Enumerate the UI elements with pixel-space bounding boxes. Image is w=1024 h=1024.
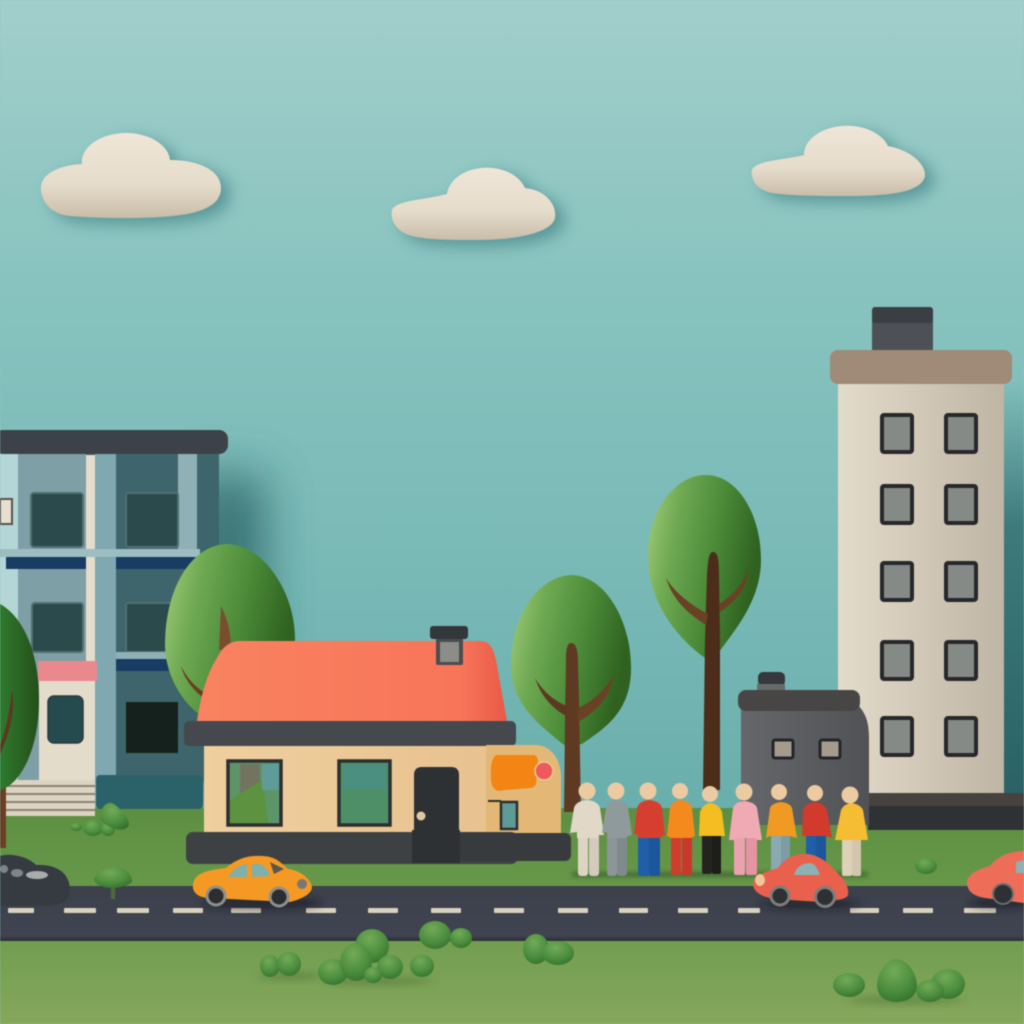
small sign on left: [0, 499, 12, 524]
foundation: [186, 832, 518, 864]
person: orange shirt red trousers: [667, 783, 695, 875]
windows: [31, 493, 178, 652]
house: [184, 626, 571, 864]
person: orange shirt grey trousers: [766, 784, 797, 871]
red car right: [967, 851, 1024, 908]
person: yellow shirt black trousers: [699, 786, 725, 874]
tall tower building: [830, 307, 1024, 830]
cloud left: [41, 133, 230, 224]
person: red shirt blue trousers: [634, 782, 665, 876]
entrance door: [39, 680, 95, 780]
center tree: [511, 575, 631, 812]
people group: [570, 782, 868, 877]
house windows: [228, 761, 281, 825]
shrub near steps: [70, 803, 129, 836]
road: [0, 886, 1024, 941]
person: cream: [570, 782, 604, 876]
small tree on road edge: [94, 867, 132, 899]
tree behind house: [165, 544, 295, 722]
shrub small right of people: [915, 858, 937, 874]
foreground bushes center: [419, 921, 574, 965]
red car center: [753, 854, 860, 909]
road dashes: [8, 908, 996, 913]
person: grey: [602, 782, 632, 876]
tower windows: [882, 415, 976, 755]
boulder left: [0, 855, 70, 906]
right wall dark strip: [1004, 380, 1024, 800]
cloud middle: [392, 168, 564, 246]
ground: grass: [0, 808, 1024, 1024]
soft shadow on the sky wall: [190, 475, 265, 795]
roof slab: [0, 430, 228, 454]
cloud right: [752, 126, 934, 202]
tall tree: [648, 475, 761, 790]
side annex: [486, 745, 561, 838]
door: [414, 767, 459, 862]
cream pillar: [86, 455, 95, 665]
foreground bushes center left: [258, 929, 434, 985]
teal planter: [96, 775, 203, 809]
tower base: [866, 793, 1024, 807]
orange car: [193, 856, 322, 909]
house roof: [197, 641, 507, 721]
steps: [3, 780, 95, 816]
grey small building: [738, 672, 869, 825]
floor bands: [0, 549, 200, 557]
person: yellow shirt beige trousers: [835, 786, 868, 876]
foreground bushes right: [833, 959, 965, 1003]
chimney: [430, 626, 468, 665]
person: pink: [729, 784, 762, 875]
people ground shadow: [572, 872, 868, 877]
person: red shirt blue trousers right: [802, 785, 832, 866]
eave: [184, 721, 516, 746]
tree left edge: [0, 604, 39, 848]
left apartment building: [0, 430, 228, 816]
